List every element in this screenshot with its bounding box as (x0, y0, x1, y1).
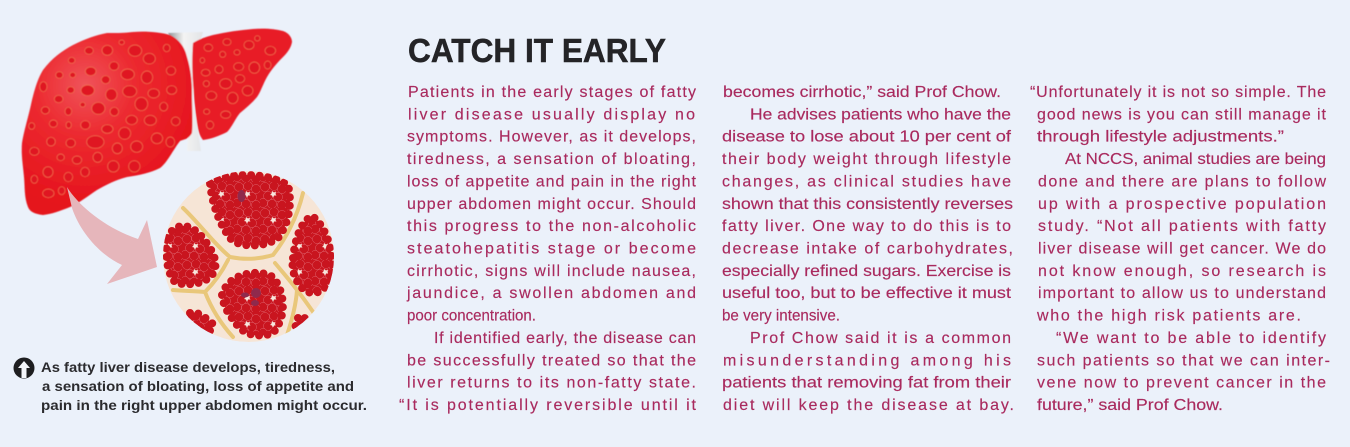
article column 3: up with a prospective population (1038, 196, 1326, 213)
article column 3: done and there are plans to follow (1038, 173, 1326, 190)
article column 1: symptoms. However, as it develops, (407, 129, 696, 146)
article column 1: cirrhotic, signs will include nausea, (407, 263, 696, 280)
article column 2: becomes cirrhotic,” said Prof Chow. (723, 84, 1001, 101)
magnified liver tissue circle (163, 171, 334, 342)
article column 3: vene now to prevent cancer in the (1037, 375, 1326, 392)
article column 2: their body weight through lifestyle (722, 151, 1011, 168)
article column 2: He advises patients who have the (750, 106, 1011, 123)
article column 1: upper abdomen might occur. Should (407, 196, 696, 213)
fibre strands (173, 193, 316, 337)
article column 1: loss of appetite and pain in the right (407, 173, 697, 190)
fat spots (29, 36, 276, 198)
article column 2: patients that removing fat from their (722, 375, 1012, 392)
icon: up arrow bullet (14, 358, 34, 378)
article column 2: misunderstanding among his (723, 352, 1011, 369)
left lobe (22, 32, 192, 215)
article column 3: At NCCS, animal studies are being (1065, 151, 1326, 168)
article column 3 (1030, 84, 1330, 414)
caption (41, 359, 367, 413)
article column 1: liver disease usually display no (408, 106, 695, 123)
article column 2: diet will keep the disease at bay. (723, 397, 1014, 414)
tissue background (163, 171, 334, 342)
article column 3: future,” said Prof Chow. (1037, 397, 1223, 414)
right lobe (192, 29, 292, 140)
article column 2: changes, as clinical studies have (722, 173, 1011, 190)
article column 1: liver returns to its non-fatty state. (407, 375, 696, 392)
article column 3: “Unfortunately it is not so simple. The (1030, 84, 1326, 101)
article column 1: tiredness, a sensation of bloating, (407, 151, 696, 168)
illustration: liver (22, 29, 292, 215)
title: CATCH IT EARLY (408, 32, 666, 69)
article column 1: “It is potentially reversible until it (399, 397, 697, 414)
article column 3: important to allow us to understand (1038, 285, 1326, 302)
article column 1 (399, 84, 697, 414)
caption: a sensation of bloating, loss of appetite and (42, 378, 354, 394)
article column 3: study. “Not all patients with fatty (1038, 218, 1326, 235)
article column 2: useful too, but to be effective it must (722, 285, 1012, 302)
article column 3: such patients so that we can inter- (1037, 352, 1330, 369)
article column 1: steatohepatitis stage or become (407, 240, 696, 258)
caption: pain in the right upper abdomen might occur. (41, 397, 367, 413)
article column 1: jaundice, a swollen abdomen and (406, 285, 696, 302)
article column 3: who the high risk patients are. (1036, 308, 1301, 325)
article column 2: Prof Chow said it is a common (750, 330, 1011, 347)
article column 2: disease to lose about 10 per cent of (722, 129, 1012, 146)
article column 3: “We want to be able to identify (1056, 330, 1326, 347)
article column 2: be very intensive. (722, 308, 840, 325)
article column 3: through lifestyle adjustments.” (1037, 129, 1284, 146)
caption: As fatty liver disease develops, tiredness, (41, 359, 335, 375)
article column 1: this progress to the non-alcoholic (407, 218, 696, 235)
article column 2: especially refined sugars. Exercise is (722, 263, 1011, 280)
liver cell clusters (166, 175, 332, 335)
arrow: liver to magnified tissue (67, 187, 157, 284)
article column 2: fatty liver. One way to do this is to (722, 218, 1011, 235)
article column 1: be successfully treated so that the (407, 352, 696, 369)
article column 2 (722, 84, 1014, 414)
article column 3: not know enough, so research is (1038, 263, 1326, 280)
article column 3: good news is you can still manage it (1037, 106, 1327, 123)
article column 3: liver disease will get cancer. We do (1038, 240, 1326, 258)
article column 1: If identified early, the disease can (434, 330, 696, 347)
ligament (168, 32, 203, 151)
article column 1: Patients in the early stages of fatty (408, 84, 696, 101)
article column 2: shown that this consistently reverses (722, 196, 1013, 213)
article column 1: poor concentration. (407, 308, 536, 325)
dark cell nuclei (238, 190, 261, 306)
article column 2: decrease intake of carbohydrates, (722, 240, 1013, 258)
